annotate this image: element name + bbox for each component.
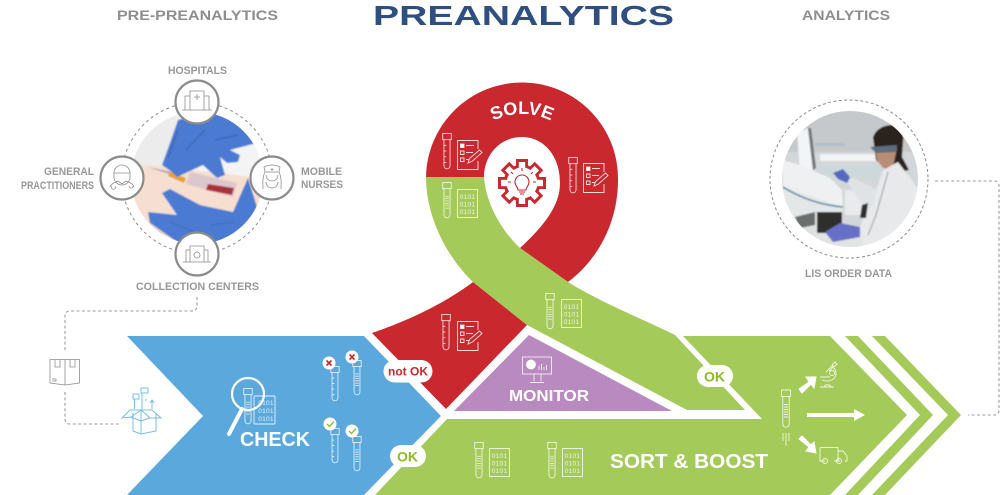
title: PREANALYTICS [373, 0, 674, 31]
accepted tube 1 [324, 418, 339, 463]
heading: pre-preanalytics: PRE-PREANALYTICS [117, 8, 278, 23]
label: mobile nurses: MOBILE [301, 166, 342, 178]
icon: hospitals [176, 80, 218, 124]
pill: not OK: not OK [388, 364, 428, 378]
icon: tube and data two [548, 442, 582, 478]
label: general practitioners: GENERAL [44, 166, 94, 178]
photo: blood draw [134, 114, 260, 242]
heading: monitor: MONITOR [509, 388, 589, 405]
icon: tube and data upper: 0101 [460, 209, 475, 216]
label: general practitioners: PRACTITIONERS [21, 180, 94, 192]
icon: tube and data one: 0101 [492, 453, 507, 460]
heading: analytics: ANALYTICS [802, 8, 890, 23]
icon: shipping box [50, 360, 80, 385]
icon: gear with light bulb [498, 159, 546, 207]
dashed ring [122, 102, 272, 254]
icon: magnifier over tube and data: 0101 [258, 416, 274, 423]
icon: magnifier over tube and data: 0101 [258, 408, 274, 415]
icon: general practitioners [100, 156, 144, 200]
stripe 2 [845, 336, 933, 495]
icon: tube and checklist lower [442, 314, 482, 350]
icon: magnifier over tube and data [229, 378, 275, 434]
icon: boosted tube [782, 390, 790, 446]
label: collection centers: COLLECTION CENTERS [136, 281, 259, 293]
heading: check: CHECK [240, 429, 311, 451]
icon: tube and data lower: 0101 [564, 304, 579, 311]
icon: magnifier over tube and data: 0101 [258, 400, 274, 407]
panel: check chevron [127, 336, 441, 495]
pill: OK lower [390, 445, 426, 467]
icon: tube and data two: 0101 [565, 460, 580, 468]
icon: tube and data one [475, 442, 510, 478]
icon: tube and data upper: 0101 [460, 202, 475, 208]
rejected tube 2 [346, 350, 361, 395]
icon: tube and data one: 0101 [492, 460, 507, 468]
icon: tube and data lower: 0101 [564, 319, 579, 326]
connector: collection to box [65, 297, 197, 424]
rejected tube 1 [322, 356, 339, 401]
arrow: straight [807, 409, 865, 421]
panel: monitor [454, 335, 672, 411]
stripe 3 [872, 336, 961, 495]
icon: tube and data lower [546, 293, 582, 329]
label: hospitals: HOSPITALS [168, 65, 227, 77]
icon: microscope [820, 362, 837, 387]
panel: green ribbon [426, 177, 745, 410]
icon: open box with tubes [122, 388, 161, 434]
label: LIS order data: LIS ORDER DATA [805, 268, 892, 280]
icon: tube and data two: 0101 [565, 468, 580, 475]
panel: analytics photo [770, 100, 928, 258]
photo: lab scientist [780, 110, 920, 250]
icon: tube and data two: 0101 [565, 453, 580, 460]
pill: OK lower: OK [397, 448, 418, 464]
icon: monitor screen [522, 357, 552, 382]
label: mobile nurses: NURSES [301, 179, 343, 191]
icon: tube and data one: 0101 [492, 468, 507, 475]
heading: solve: SOLVE [490, 102, 554, 120]
pill: not OK [384, 360, 432, 382]
icon: collection centers [176, 232, 218, 276]
accepted tube 2 [346, 424, 361, 471]
icon: tube and data lower: 0101 [564, 312, 579, 318]
dashed ring [770, 100, 928, 258]
arrow: up to microscope [799, 377, 816, 393]
panel: sort and boost chevron [375, 336, 961, 495]
icon: tube and checklist right [569, 157, 608, 193]
icon: mobile nurses [250, 156, 294, 200]
icon: tube and data upper [443, 182, 478, 218]
pill: OK right: OK [704, 368, 725, 384]
panel: not OK red path [372, 282, 527, 409]
panel: solve ribbon red [426, 82, 618, 282]
icon: tube and checklist left [443, 133, 482, 170]
connector: analytics to sort [935, 181, 999, 415]
pill: OK right [697, 365, 733, 387]
heading: sort and boost: SORT & BOOST [610, 451, 768, 473]
arrow: down to truck [799, 436, 816, 453]
icon: tube and data upper: 0101 [460, 194, 475, 201]
panel: pre-preanalytics photo hub [100, 80, 294, 276]
icon: delivery truck [820, 448, 847, 464]
